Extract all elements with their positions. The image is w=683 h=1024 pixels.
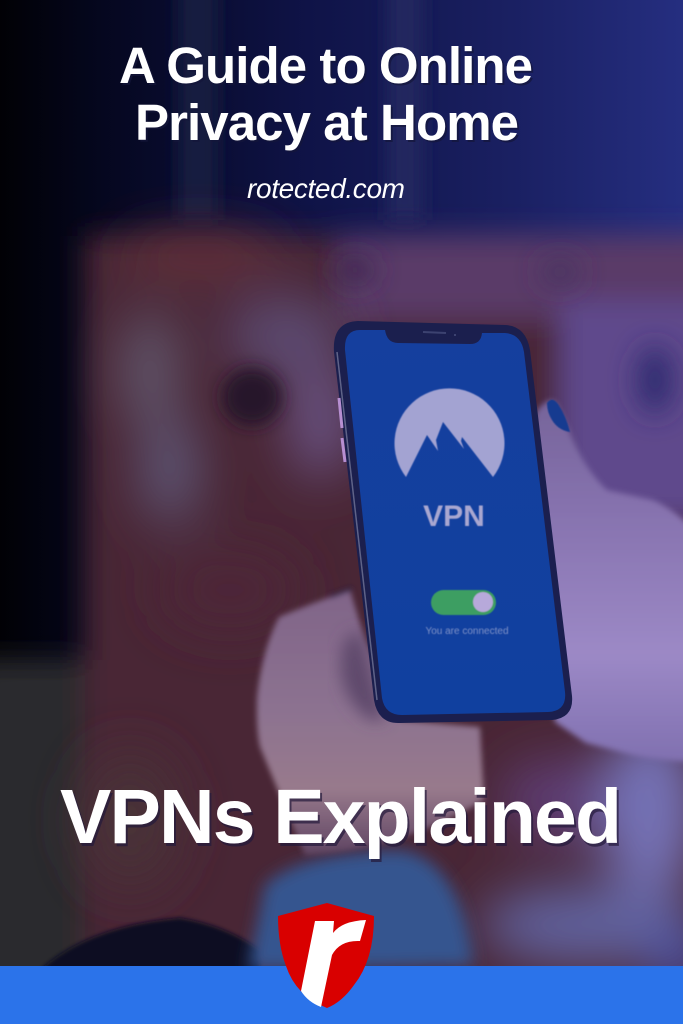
right hand [520, 400, 683, 762]
title: Privacy at Home [137, 96, 521, 153]
screen [345, 330, 565, 715]
jeans sleeve [40, 850, 474, 970]
title [119, 37, 535, 153]
icon: shield logo [278, 903, 374, 1008]
title: A Guide to Online [121, 39, 535, 96]
heading: VPNs Explained [62, 777, 624, 863]
phone body [334, 321, 572, 723]
icon: right thumb nail [547, 400, 570, 432]
toggle switch [431, 590, 496, 615]
title: A Guide to Online [119, 37, 533, 94]
phone [334, 321, 572, 723]
footer bar [0, 966, 683, 1024]
heading: VPNs Explained [60, 774, 622, 860]
icon: mountain logo [394, 388, 505, 477]
website: rotected.com [247, 173, 405, 204]
side buttons [339, 398, 345, 462]
VPN label: VPN [423, 500, 485, 533]
speaker and camera [423, 332, 456, 335]
status text: You are connected [425, 626, 509, 637]
left hand [257, 589, 484, 855]
title: Privacy at Home [135, 94, 519, 151]
hand fold shading [341, 630, 385, 720]
